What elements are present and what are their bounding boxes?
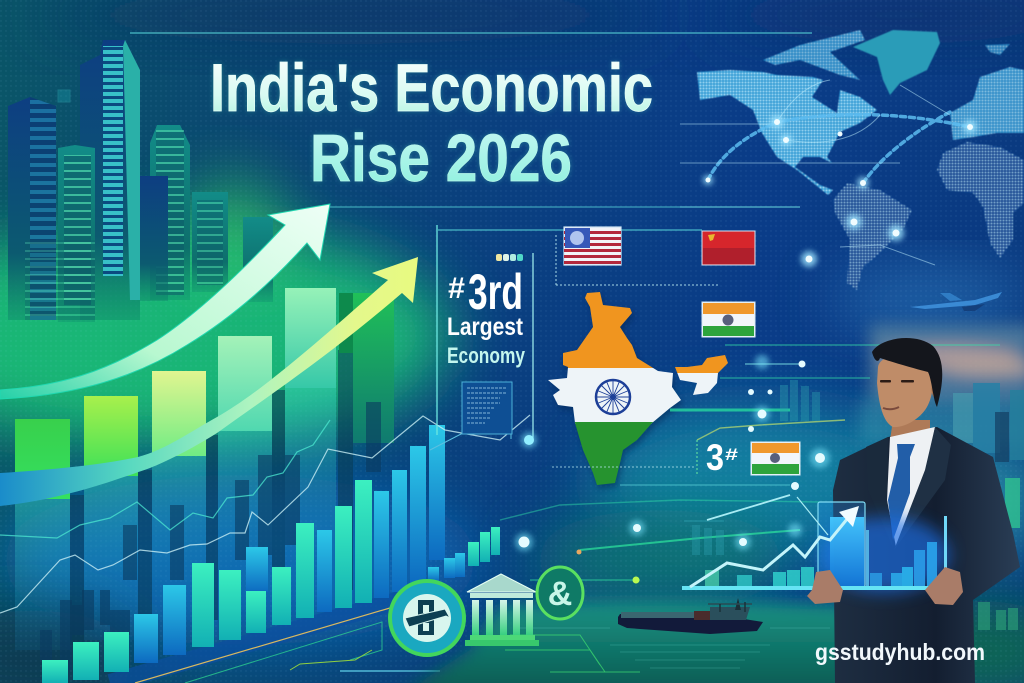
face: [877, 354, 933, 427]
title: Rise 2026: [310, 121, 572, 196]
eyes and mouth: [880, 380, 914, 382]
rising green bar chart: [15, 288, 394, 650]
green circuit lines over water: [505, 635, 640, 672]
flag: China: [702, 231, 755, 265]
top horizontal light lines: [130, 33, 812, 285]
shimmer on water: [520, 628, 830, 668]
road band under the small bars: [110, 600, 440, 683]
hair: [872, 338, 942, 407]
title: Rise 2026: [310, 121, 572, 196]
lapel right: [894, 427, 951, 550]
glowing data nodes: [515, 355, 830, 675]
panel: 3rd largest economy: Economy: [447, 343, 526, 368]
translucent gaps between green bars: [70, 350, 353, 645]
website label: gsstudyhub.com: [815, 639, 985, 665]
upward arrow: upper: [0, 204, 330, 399]
small blue and teal bars: [42, 425, 500, 683]
airplane: [910, 292, 1002, 311]
3# label and flag: #: [725, 445, 739, 464]
ashoka chakra: [596, 380, 630, 414]
panel: 3rd largest economy: 3rd: [468, 264, 523, 320]
shirt: [887, 427, 935, 547]
title: India's Economic: [210, 50, 653, 126]
panel: 3rd largest economy: Largest: [447, 313, 524, 341]
panel: 3rd largest economy: #: [448, 272, 465, 305]
right side network lines: [500, 345, 1000, 672]
city skyline left: [8, 40, 273, 322]
ghost bars behind small bars: [40, 402, 381, 670]
neck: [890, 420, 930, 460]
ear: [932, 380, 940, 398]
necktie: [888, 444, 915, 540]
skyline right: [953, 383, 1024, 630]
icon: bank building: [465, 574, 539, 646]
3# label and flag: 3: [706, 437, 724, 478]
sky behind the skyline: [860, 325, 1024, 445]
lapel left: [866, 437, 893, 548]
map of India in tricolour: [548, 292, 728, 490]
flag: USA: [564, 227, 621, 265]
upward arrow: lower: [0, 257, 418, 506]
title: [210, 50, 653, 196]
suit jacket: [833, 427, 1020, 683]
glow behind holographic chart: [820, 517, 950, 593]
holographic chart: [682, 495, 947, 590]
flag: India: [702, 302, 755, 337]
trend lines over chart: [0, 415, 530, 613]
world map: [680, 30, 1024, 290]
water: [400, 601, 850, 683]
icon: ampersand badge: &: [548, 575, 572, 613]
dim background bars in centre right: [684, 380, 820, 555]
title: India's Economic: [210, 50, 653, 126]
hands holding the chart: [807, 567, 963, 605]
cargo ship: [618, 598, 763, 634]
3# label and flag: [706, 437, 800, 478]
icon: ampersand badge: [537, 567, 583, 619]
person with suit: [833, 338, 1020, 683]
panel: 3rd largest economy: [430, 225, 534, 450]
icon: finance badge: [390, 581, 464, 655]
